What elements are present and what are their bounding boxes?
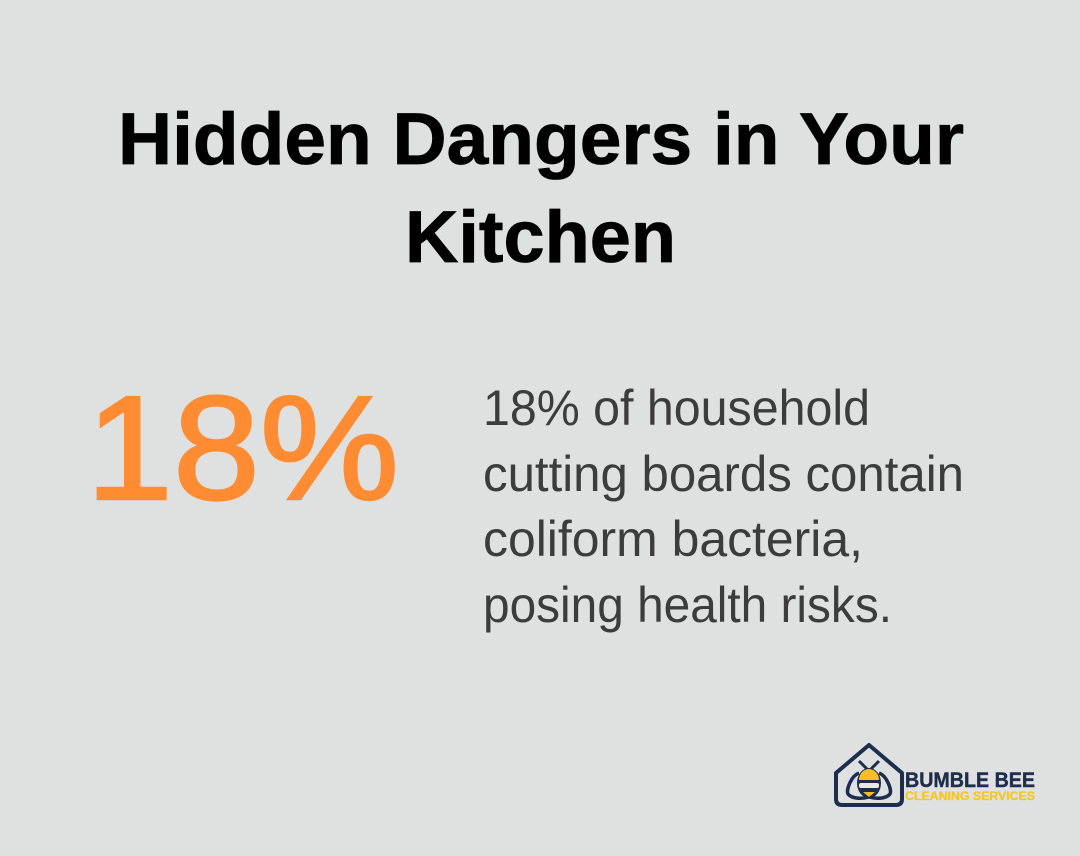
big statistic: 18%: 18% — [86, 366, 399, 531]
icon: house outline — [836, 745, 902, 805]
description text: posing health risks. — [483, 577, 892, 633]
logo: Bumble Bee Cleaning Services — [836, 745, 1035, 805]
logo wordmark: BUMBLE BEE — [905, 769, 1035, 792]
description text: 18% of household — [483, 380, 870, 436]
title: Hidden Dangers in Your — [118, 99, 964, 180]
title — [118, 99, 964, 278]
description text: coliform bacteria, — [483, 511, 863, 567]
description text — [483, 380, 964, 633]
title: Kitchen — [405, 197, 676, 278]
logo tagline: CLEANING SERVICES — [905, 789, 1035, 803]
description text: cutting boards contain — [483, 446, 964, 502]
icon: bee — [848, 761, 890, 798]
